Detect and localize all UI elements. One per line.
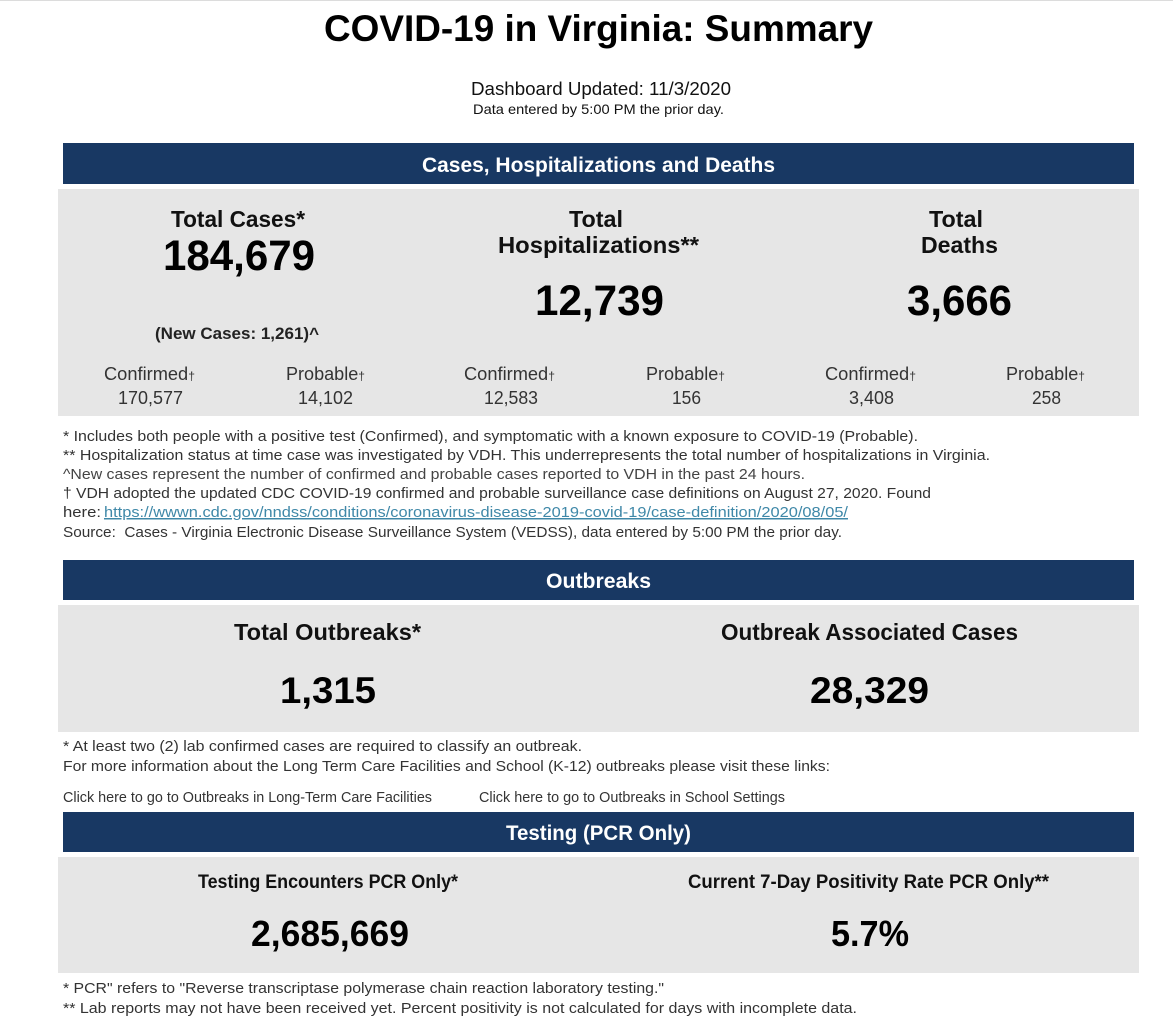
link: school settings: Click here to go to Outbreaks in School Settings bbox=[479, 790, 785, 806]
section header: testing: Testing (PCR Only) bbox=[506, 822, 691, 845]
section header: cases, hospitalizations and deaths bbox=[63, 143, 1134, 184]
cases confirmed: Confirmed† bbox=[104, 364, 195, 384]
hospitalizations confirmed: 12,583 bbox=[484, 388, 538, 408]
footnotes: testing: ** Lab reports may not have been received yet. Percent positivity is not calculated for days with incomplete data. bbox=[63, 1000, 857, 1017]
total hospitalizations heading: Hospitalizations** bbox=[498, 232, 699, 258]
footnotes: cases: ^New cases represent the number of confirmed and probable cases reported to VDH in the past 24 hours. bbox=[63, 466, 805, 483]
footnotes: cases: https://wwwn.cdc.gov/nndss/conditions/coronavirus-disease-2019-covid-19/case-definition/2020/08/05/ bbox=[104, 504, 849, 521]
cases confirmed bbox=[104, 364, 195, 408]
total outbreaks heading: Total Outbreaks* bbox=[234, 619, 421, 645]
footnotes: cases: * Includes both people with a positive test (Confirmed), and symptomatic with a known exposure to COVID-19 (Probable). bbox=[63, 428, 918, 445]
testing encounters heading: Testing Encounters PCR Only* bbox=[198, 872, 459, 893]
deaths confirmed: 3,408 bbox=[849, 388, 894, 408]
deaths probable bbox=[1006, 364, 1085, 408]
panel: outbreaks bbox=[58, 605, 1139, 732]
footnotes: cases: here: bbox=[63, 504, 101, 521]
footnotes: cases: Source: Cases - Virginia Electronic Disease Surveillance System (VEDSS), data entered by 5:00 PM the prior day. bbox=[63, 524, 842, 541]
total hospitalizations heading: Total bbox=[569, 206, 623, 232]
section header: testing bbox=[63, 812, 1134, 852]
positivity rate value: 5.7% bbox=[831, 913, 909, 954]
dashboard updated date: Dashboard Updated: 11/3/2020 bbox=[471, 79, 731, 99]
new cases: (New Cases: 1,261)^ bbox=[155, 324, 319, 343]
positivity rate heading: Current 7-Day Positivity Rate PCR Only** bbox=[688, 872, 1050, 893]
deaths probable: 258 bbox=[1032, 388, 1061, 408]
panel: cases, hospitalizations and deaths bbox=[58, 189, 1139, 416]
cases probable: Probable† bbox=[286, 364, 365, 384]
hospitalizations confirmed: Confirmed† bbox=[464, 364, 555, 384]
title: COVID-19 in Virginia: Summary bbox=[324, 8, 873, 49]
footnotes: cases: ** Hospitalization status at time case was investigated by VDH. This underrepresents the total number of hospitalizations in Virginia. bbox=[63, 447, 990, 464]
footnotes: outbreaks: For more information about the Long Term Care Facilities and School (K-12) outbreaks please visit these links: bbox=[63, 758, 830, 775]
outbreak associated cases value: 28,329 bbox=[810, 670, 929, 711]
testing encounters value: 2,685,669 bbox=[251, 913, 409, 954]
hospitalizations probable: 156 bbox=[672, 388, 701, 408]
cases probable: 14,102 bbox=[298, 388, 353, 408]
deaths confirmed bbox=[825, 364, 916, 408]
data entry note: Data entered by 5:00 PM the prior day. bbox=[473, 101, 724, 117]
total cases heading: Total Cases* bbox=[171, 206, 305, 232]
hospitalizations probable: Probable† bbox=[646, 364, 725, 384]
deaths confirmed: Confirmed† bbox=[825, 364, 916, 384]
section header: cases, hospitalizations and deaths: Cases, Hospitalizations and Deaths bbox=[422, 154, 775, 177]
footnotes: testing: * PCR" refers to "Reverse transcriptase polymerase chain reaction laboratory testing." bbox=[63, 980, 664, 997]
outbreak associated cases heading: Outbreak Associated Cases bbox=[721, 619, 1018, 645]
section header: outbreaks bbox=[63, 560, 1134, 600]
total deaths value: 3,666 bbox=[907, 277, 1012, 325]
total deaths heading bbox=[921, 206, 998, 258]
total outbreaks value: 1,315 bbox=[280, 670, 376, 711]
hospitalizations probable bbox=[646, 364, 725, 408]
link: long-term care facilities: Click here to go to Outbreaks in Long-Term Care Facilities bbox=[63, 790, 432, 806]
total deaths heading: Deaths bbox=[921, 232, 998, 258]
footnotes: outbreaks bbox=[63, 738, 830, 775]
hospitalizations confirmed bbox=[464, 364, 555, 408]
section header: outbreaks: Outbreaks bbox=[546, 570, 651, 593]
cases confirmed: 170,577 bbox=[118, 388, 183, 408]
deaths probable: Probable† bbox=[1006, 364, 1085, 384]
total deaths heading: Total bbox=[929, 206, 983, 232]
total hospitalizations value: 12,739 bbox=[535, 277, 664, 325]
panel: testing bbox=[58, 857, 1139, 973]
footnotes: cases: † VDH adopted the updated CDC COVID-19 confirmed and probable surveillance case definitions on August 27, 2020. Found bbox=[63, 485, 931, 502]
cases probable bbox=[286, 364, 365, 408]
total cases value: 184,679 bbox=[163, 232, 315, 280]
footnotes: testing bbox=[63, 980, 857, 1017]
total hospitalizations heading bbox=[498, 206, 699, 258]
footnotes: outbreaks: * At least two (2) lab confirmed cases are required to classify an outbreak. bbox=[63, 738, 582, 755]
footnotes: cases bbox=[63, 428, 990, 541]
